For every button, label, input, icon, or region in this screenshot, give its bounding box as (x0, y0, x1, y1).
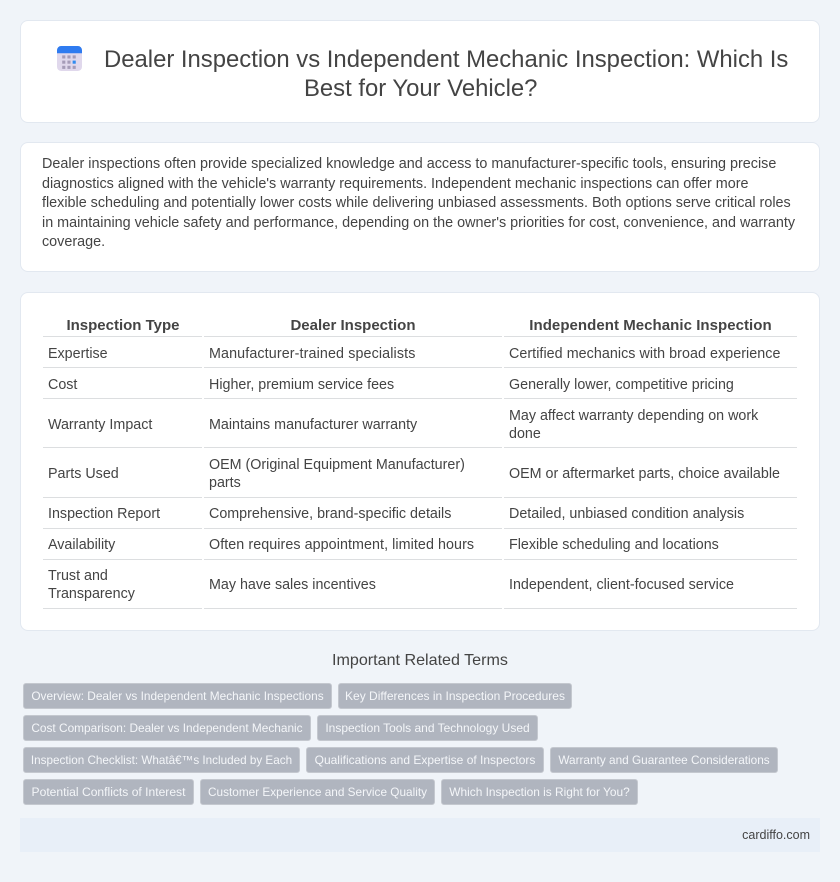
row: expertise: Manufacturer-trained specialists (209, 346, 415, 362)
table header: Independent Mechanic Inspection (529, 317, 772, 334)
footer: source: cardiffo.com (742, 828, 810, 842)
row: availability: Often requires appointment, limited hours (209, 537, 474, 553)
tag (23, 747, 300, 773)
row: availability: Flexible scheduling and locations (509, 537, 719, 553)
title: Best for Your Vehicle? (304, 75, 537, 102)
tag: Customer Experience and Service Quality (208, 785, 427, 799)
text block: introduction: diagnostics aligned with the vehicle's warranty requirements. Independent mechanic inspections can offer more (42, 176, 748, 192)
row: parts used: OEM (Original Equipment Manufacturer) (209, 457, 465, 473)
row: trust and transparency: Transparency (48, 586, 135, 602)
tag (23, 715, 311, 741)
row: inspection report: Inspection Report (48, 506, 160, 522)
row: trust and transparency: Trust and (48, 568, 108, 584)
icon: calendar (57, 46, 82, 71)
tag (306, 747, 544, 773)
tag (200, 779, 435, 805)
tag (317, 715, 538, 741)
table header (66, 317, 772, 334)
panel: related term tags (23, 683, 778, 805)
row: inspection report: Comprehensive, brand-specific details (209, 506, 451, 522)
row: trust and transparency (48, 568, 734, 602)
row: expertise: Expertise (48, 346, 108, 362)
row: cost: Cost (48, 377, 77, 393)
row: inspection report (48, 506, 744, 522)
row: warranty impact: done (509, 426, 541, 442)
row: warranty impact: Warranty Impact (48, 417, 152, 433)
tag (441, 779, 638, 805)
tag (23, 779, 194, 805)
row: expertise: Certified mechanics with broad experience (509, 346, 780, 362)
panel: title card (20, 20, 820, 123)
row: trust and transparency: Independent, client-focused service (509, 577, 734, 593)
row: cost: Higher, premium service fees (209, 377, 394, 393)
tag: Inspection Tools and Technology Used (325, 721, 530, 735)
tag: Which Inspection is Right for You? (449, 785, 630, 799)
tag: Key Differences in Inspection Procedures (345, 689, 565, 703)
title (104, 46, 788, 102)
row: parts used (48, 457, 780, 491)
tag: Warranty and Guarantee Considerations (558, 753, 770, 767)
tag (23, 683, 332, 709)
row: inspection report: Detailed, unbiased condition analysis (509, 506, 744, 522)
heading: related terms: Important Related Terms (332, 651, 508, 669)
row: parts used: OEM or aftermarket parts, choice available (509, 466, 780, 482)
row: parts used: Parts Used (48, 466, 119, 482)
tag: Inspection Checklist: Whatâ€™s Included by Each (31, 754, 292, 767)
text block: introduction: flexible scheduling and potentially lower costs while delivering unbiased assessments. Both options serve critical roles (42, 195, 791, 211)
tag (338, 683, 572, 709)
text block: introduction: in maintaining vehicle safety and performance, depending on the owner's priorities for cost, convenience, and warranty (42, 214, 795, 230)
row: parts used: parts (209, 475, 241, 491)
text block: introduction (42, 156, 795, 250)
text block: introduction: Dealer inspections often provide specialized knowledge and access to manufacturer-specific tools, ensuring precise (42, 156, 776, 172)
tag (550, 747, 778, 773)
row: availability: Availability (48, 537, 115, 553)
title: Dealer Inspection vs Independent Mechanic Inspection: Which Is (104, 46, 788, 73)
tag: Qualifications and Expertise of Inspectors (315, 753, 535, 767)
table header: Inspection Type (66, 317, 180, 334)
row: expertise (48, 346, 780, 362)
row: availability (48, 537, 719, 553)
panel: comparison table (20, 292, 820, 631)
row: warranty impact: Maintains manufacturer warranty (209, 417, 417, 433)
footer (20, 818, 820, 852)
tag: Cost Comparison: Dealer vs Independent Mechanic (31, 721, 303, 735)
tag: Potential Conflicts of Interest (32, 785, 185, 799)
row: cost (48, 377, 734, 393)
row: cost: Generally lower, competitive pricing (509, 377, 734, 393)
table header: Dealer Inspection (290, 317, 416, 334)
row: warranty impact (48, 408, 758, 442)
tag: Overview: Dealer vs Independent Mechanic Inspections (31, 689, 324, 703)
panel: introduction (20, 142, 820, 272)
row: warranty impact: May affect warranty depending on work (509, 408, 758, 424)
row: trust and transparency: May have sales incentives (209, 577, 376, 593)
text block: introduction: coverage. (42, 234, 105, 250)
